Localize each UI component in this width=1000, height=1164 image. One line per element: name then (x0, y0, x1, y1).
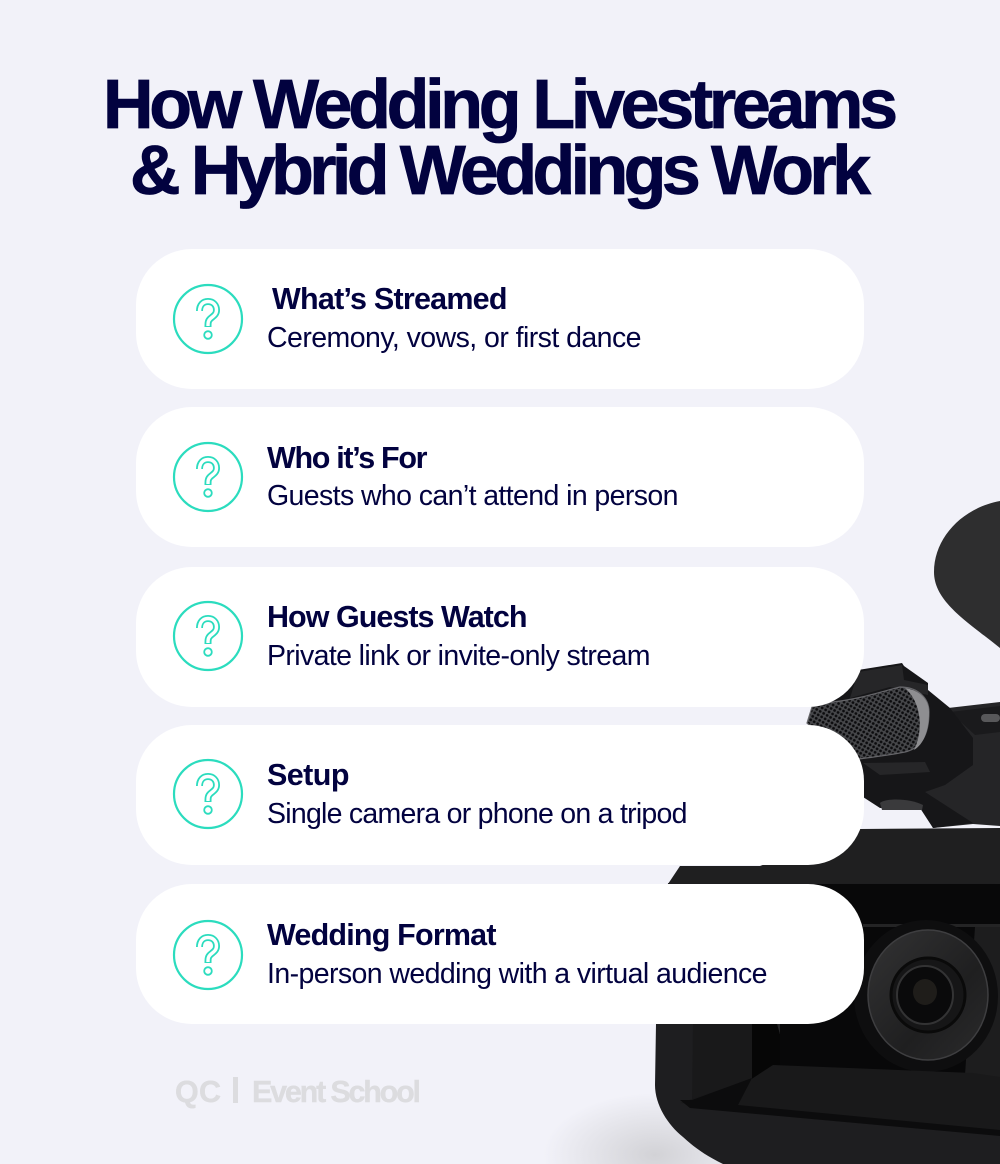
foam microphone cover (934, 501, 1000, 648)
microphone grille (807, 687, 929, 760)
heading: What’s Streamed (272, 282, 508, 316)
body (655, 883, 1000, 1164)
title: How Wedding Livestreams (103, 65, 898, 143)
heading: How Guests Watch (267, 600, 528, 634)
panel: Wedding Format (136, 884, 864, 1024)
lens housing (780, 884, 1000, 1078)
logo: QC Event School (175, 1075, 421, 1109)
logo: QC Event School: Event School (252, 1075, 421, 1109)
text: Single camera or phone on a tripod (267, 798, 688, 830)
icon: question mark (174, 602, 242, 670)
heading: Setup (267, 758, 350, 792)
lower hood flap (680, 1065, 1000, 1133)
icon: question mark (174, 443, 242, 511)
panel: How Guests Watch (136, 567, 864, 707)
body top band (668, 828, 1000, 884)
panel: Who it's For (136, 407, 864, 547)
microphone body (807, 663, 973, 828)
lens (854, 920, 998, 1072)
panel: What's Streamed (136, 249, 864, 389)
text: Private link or invite-only stream (267, 640, 650, 672)
title (103, 65, 898, 209)
heading: Wedding Format (267, 918, 496, 952)
heading: Who it’s For (267, 441, 428, 475)
panel: Setup (136, 725, 864, 865)
right body slab (915, 702, 1000, 828)
title: & Hybrid Weddings Work (130, 131, 871, 209)
text: Ceremony, vows, or first dance (267, 322, 642, 354)
text: In-person wedding with a virtual audience (267, 958, 768, 990)
icon: question mark (174, 285, 242, 353)
photo: video camera (543, 501, 1000, 1164)
text: Guests who can’t attend in person (267, 480, 678, 512)
icon: question mark (174, 921, 242, 989)
logo: QC Event School: QC (175, 1075, 221, 1109)
icon: question mark (174, 760, 242, 828)
